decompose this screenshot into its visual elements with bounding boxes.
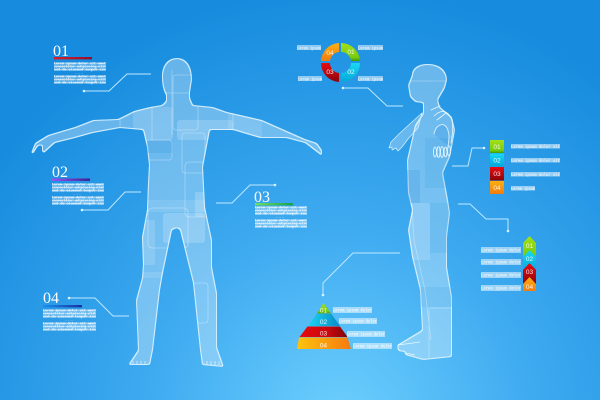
callout 03 body text: sed do eiusmod tempor inc <box>255 212 307 216</box>
callout 04 body text: Lorem ipsum dolor sit amet <box>43 308 96 314</box>
callout 02 body text: ... <box>73 192 81 196</box>
segment 02 <box>341 63 360 82</box>
callout 04 body text: sed do eiusmod tempor inc <box>43 314 96 320</box>
arrow stack labels: Lorem ipsum dolor <box>481 260 521 266</box>
callout 03 body text: ... <box>276 216 284 220</box>
arrow stack: 04 <box>526 284 533 291</box>
callout 01 body text: consectetur adipiscing elit <box>54 64 106 70</box>
pyramid chart: 01 <box>320 308 327 314</box>
callout 02 <box>52 164 104 206</box>
callout 04: 04 <box>43 290 59 307</box>
callout 01 body text <box>54 62 106 86</box>
callout 01 body text: ... <box>75 72 83 76</box>
callout 01 body text: consectetur adipiscing elit <box>54 78 106 82</box>
arrow 02 <box>523 250 536 272</box>
callout 02 body text: Lorem ipsum dolor sit amet <box>52 182 104 188</box>
callout 02 body text: sed do eiusmod tempor inc <box>52 188 104 194</box>
callout 02 body text <box>52 182 104 206</box>
legend 03: 03 <box>493 171 501 178</box>
pyramid chart: 02 <box>320 319 327 326</box>
callout 02: 02 <box>52 164 68 181</box>
callout 04 body text: sed do eiusmod tempor inc <box>43 328 96 332</box>
donut chart: 04 <box>326 50 334 57</box>
arrow stack labels <box>481 247 521 292</box>
arrow stack labels: Lorem ipsum dolor <box>481 248 521 254</box>
arrow stack <box>523 236 536 291</box>
arrow stack: 03 <box>526 269 533 276</box>
side body figure <box>389 64 455 360</box>
callout 01: 01 <box>53 43 69 60</box>
legend 04: Lorem ipsum <box>511 186 535 192</box>
callout 01 body text: Lorem ipsum dolor sit amet <box>54 62 106 66</box>
callout 03 <box>254 189 307 230</box>
arrow stack labels: Lorem ipsum dolor <box>481 286 521 292</box>
arrow 04 <box>523 277 536 291</box>
pyramid chart: 04 <box>320 342 327 350</box>
donut labels <box>297 45 383 82</box>
numbered legend <box>490 140 560 194</box>
callout 02 body text: Lorem ipsum dolor sit amet <box>52 196 104 200</box>
legend 03 <box>490 167 560 180</box>
pyramid chart: 03 <box>320 330 327 338</box>
callout 04 body text: consectetur adipiscing elit <box>43 312 96 316</box>
arrow stack: 01 <box>526 243 533 250</box>
arrow 03 <box>523 263 536 285</box>
callout 03 body text: sed do eiusmod tempor inc <box>255 224 307 230</box>
donut labels: Lorem ipsum <box>298 76 322 82</box>
callout 01 body text: Lorem ipsum dolor sit amet <box>54 74 106 80</box>
legend 04 <box>490 181 535 194</box>
donut chart <box>321 43 360 82</box>
segment 04 <box>321 43 339 61</box>
pyramid labels: Lorem ipsum dolor <box>353 344 392 350</box>
callout 04 body text <box>43 308 96 332</box>
legend 02: 02 <box>493 158 501 164</box>
shoulder and hand detail <box>431 106 453 158</box>
callout 01 body text: sed do eiusmod tempor inc <box>54 80 106 86</box>
pyramid labels: Lorem ipsum dolor <box>339 318 377 324</box>
callout 01 <box>53 43 106 86</box>
pyramid labels: Lorem ipsum dolor <box>347 332 385 338</box>
callout 01 body text: sed do eiusmod tempor inc <box>54 68 106 72</box>
callout 02 body text: consectetur adipiscing elit <box>52 186 104 190</box>
callout 03 body text <box>255 206 307 230</box>
callout 03 body text: Lorem ipsum dolor sit amet <box>255 206 307 210</box>
callout 04 body text: Lorem ipsum dolor sit amet <box>43 322 96 326</box>
legend 02 <box>490 154 560 166</box>
donut chart: 03 <box>326 69 334 76</box>
foot toes <box>133 361 219 365</box>
connector lines <box>68 74 509 316</box>
legend 04: 04 <box>493 185 501 192</box>
pyramid labels <box>333 307 392 350</box>
callout 03 body text: consectetur adipiscing elit <box>255 208 307 214</box>
callout 03: 03 <box>254 189 270 206</box>
arrow stack labels: Lorem ipsum dolor <box>481 272 521 278</box>
donut labels: Lorem ipsum <box>358 46 383 52</box>
callout 02 body text: sed do eiusmod tempor inc <box>52 202 104 206</box>
pyramid labels: Lorem ipsum dolor <box>333 308 372 314</box>
front body figure <box>31 58 322 367</box>
callout 03 body text: Lorem ipsum dolor sit amet <box>255 218 307 224</box>
donut chart: 02 <box>347 69 355 76</box>
donut chart: 01 <box>347 49 355 56</box>
segment 01 <box>341 43 360 61</box>
segment 03 <box>321 63 339 82</box>
legend 02: Lorem ipsum dolor sit <box>511 158 560 164</box>
legend 03: Lorem ipsum dolor sit <box>511 172 560 178</box>
near arm raised <box>389 113 422 151</box>
callout 04 body text: consectetur adipiscing elit <box>43 324 96 330</box>
pyramid chart <box>297 303 351 350</box>
arrow stack: 02 <box>526 256 533 263</box>
side foot detail <box>398 342 420 355</box>
callout 02 body text: consectetur adipiscing elit <box>52 198 104 204</box>
donut labels: Lorem ipsum <box>297 46 321 52</box>
donut labels: Lorem ipsum <box>358 76 383 82</box>
legend 01: 01 <box>493 144 501 151</box>
callout 04 <box>43 290 96 332</box>
callout 04 body text: ... <box>65 318 73 322</box>
arrow 01 <box>523 236 536 260</box>
legend 01: Lorem ipsum dolor sit <box>511 144 560 150</box>
legend 01 <box>490 140 560 153</box>
callout 03 body text: consectetur adipiscing elit <box>255 222 307 226</box>
